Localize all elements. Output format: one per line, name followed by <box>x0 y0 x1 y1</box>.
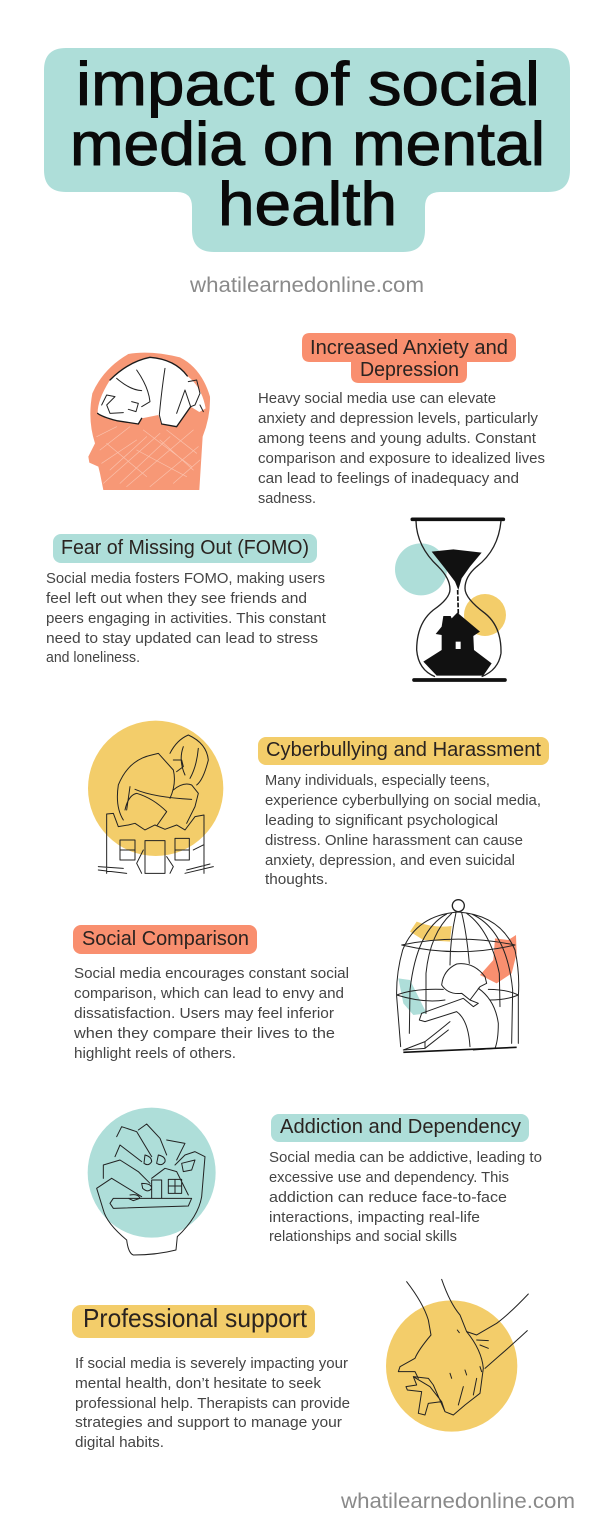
title text: media on mental <box>70 110 545 178</box>
section: social comparison <box>73 900 519 1062</box>
body text: sadness. <box>258 490 316 507</box>
icon: fist squeezing house on teal circle <box>88 1108 216 1255</box>
body text <box>73 965 349 1062</box>
body text: mental health, don’t hesitate to seek <box>75 1375 322 1392</box>
body text: feel left out when they see friends and <box>46 590 307 607</box>
body text: among teens and young adults. Constant <box>258 430 537 447</box>
body text: peers engaging in activities. This constant <box>46 610 327 627</box>
body text: highlight reels of others. <box>74 1045 236 1062</box>
section: fear of missing out <box>46 519 506 680</box>
body text: leading to significant psychological <box>265 812 498 829</box>
icon: holding hands on yellow circle <box>386 1279 528 1432</box>
body text: comparison and exposure to idealized lives <box>258 450 545 467</box>
body text: anxiety, depression, and even suicidal <box>265 852 515 869</box>
body text: distress. Online harassment can cause <box>265 832 523 849</box>
body text: thoughts. <box>265 871 328 888</box>
body text: addiction can reduce face-to-face <box>269 1189 507 1206</box>
body text: experience cyberbullying on social media, <box>265 792 541 809</box>
body text: Social media fosters FOMO, making users <box>46 570 325 587</box>
body text: dissatisfaction. Users may feel inferior <box>74 1005 334 1022</box>
body text <box>46 570 327 666</box>
section: professional support <box>72 1279 528 1451</box>
body text: Heavy social media use can elevate <box>258 390 496 407</box>
body text <box>265 772 541 888</box>
body text: Social media can be addictive, leading to <box>269 1149 542 1166</box>
body text <box>269 1149 542 1245</box>
body text: comparison, which can lead to envy and <box>74 985 344 1002</box>
title panel <box>44 48 570 252</box>
title text: impact of social <box>76 50 540 118</box>
icon: figure in birdcage <box>397 900 519 1052</box>
heading tag: Cyberbullying and Harassment <box>266 739 541 761</box>
subtitle: website: whatilearnedonline.com <box>189 274 424 297</box>
body text: can lead to feelings of inadequacy and <box>258 470 519 487</box>
icon: figure crouched on a house over yellow circle <box>88 721 223 873</box>
body text: Social media encourages constant social <box>74 965 349 982</box>
footer: website: whatilearnedonline.com <box>340 1490 575 1513</box>
section: addiction and dependency <box>88 1108 542 1255</box>
body text: interactions, impacting real-life <box>269 1209 480 1226</box>
body text: when they compare their lives to the <box>73 1025 335 1042</box>
body text: and loneliness. <box>46 649 140 666</box>
heading tag <box>302 333 516 383</box>
body text: relationships and social skills <box>269 1228 457 1245</box>
body text <box>75 1355 350 1451</box>
body text: anxiety and depression levels, particularly <box>258 410 538 427</box>
heading tag: Addiction and Dependency <box>280 1116 521 1138</box>
section: cyberbullying and harassment <box>88 721 549 888</box>
icon: curled figure inside orange head <box>88 353 210 490</box>
icon: hourglass with house <box>395 519 506 680</box>
title text: health <box>218 170 397 238</box>
section: increased anxiety and depression <box>88 333 545 507</box>
body text: If social media is severely impacting your <box>75 1355 348 1372</box>
heading tag: Depression <box>360 359 459 381</box>
body text: need to stay updated can lead to stress <box>46 630 318 647</box>
body text: professional help. Therapists can provide <box>75 1395 350 1412</box>
heading tag: Professional support <box>83 1303 308 1333</box>
body text <box>258 390 545 507</box>
heading tag: Increased Anxiety and <box>310 337 508 359</box>
body text: Many individuals, especially teens, <box>265 772 490 789</box>
heading tag: Social Comparison <box>82 928 249 950</box>
heading tag <box>73 925 257 954</box>
body text: strategies and support to manage your <box>75 1414 342 1431</box>
body text: excessive use and dependency. This <box>269 1169 509 1186</box>
body text: digital habits. <box>75 1434 164 1451</box>
title text <box>70 50 545 238</box>
heading tag: Fear of Missing Out (FOMO) <box>61 537 309 559</box>
